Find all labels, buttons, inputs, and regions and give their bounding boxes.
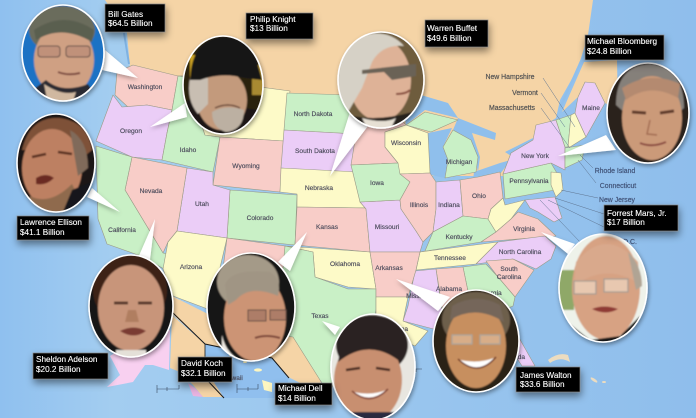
label: Michael Bloomberg (585, 35, 664, 60)
state: Kentucky (420, 216, 496, 252)
state: South Dakota (281, 130, 358, 174)
state labels: Washington (128, 84, 163, 91)
state: Vermont (556, 115, 571, 147)
pointer: James Walton to Arkansas (396, 279, 450, 311)
state: Maine (575, 82, 605, 137)
state labels: Wyoming (232, 163, 260, 170)
state labels: Utah (195, 201, 209, 208)
state: New Hampshire (568, 113, 586, 147)
state: Washington (115, 65, 178, 110)
state labels: New York (521, 153, 550, 160)
state labels: Alabama (436, 286, 462, 293)
portrait: Sheldon Adelson (88, 254, 174, 358)
state: Virginia (481, 212, 556, 242)
state: Kansas (295, 207, 370, 252)
map of the United States and neighbours (96, 0, 637, 398)
state labels: California (108, 227, 136, 234)
state labels: Mississippi (406, 293, 438, 300)
state: North Dakota (284, 93, 356, 134)
state: New Jersey (551, 172, 563, 197)
state labels: Virginia (513, 226, 535, 233)
Hawaiian islands (229, 354, 272, 392)
label: Lawrence Ellison (17, 216, 89, 240)
Bahamas and Cuba (548, 354, 606, 383)
state: Tennessee (416, 242, 498, 270)
state: Michigan (406, 112, 478, 178)
Alaska panhandle (188, 383, 203, 397)
scale bars (157, 369, 422, 393)
Puget inlet (124, 33, 129, 64)
state: Iowa (351, 163, 410, 202)
portrait: Michael Bloomberg (605, 62, 691, 166)
state labels: Vermont (512, 90, 538, 97)
state: Missouri (360, 200, 423, 252)
state: Alabama (436, 267, 475, 325)
state: Florida (445, 318, 535, 366)
leader lines (540, 78, 606, 242)
label: Sheldon Adelson: $20.2 Billion (36, 365, 81, 374)
state labels: Maine (582, 105, 600, 112)
label: Warren Buffet: Warren Buffet (427, 24, 478, 33)
portrait: Philip Knight (182, 36, 264, 136)
state labels: Missouri (375, 224, 400, 231)
state: Maryland and Delaware (525, 197, 562, 222)
state labels: Illinois (410, 202, 429, 209)
label: Bill Gates (105, 4, 165, 32)
label: Michael Dell: $14 Billion (278, 394, 316, 403)
state: Mississippi (403, 269, 445, 332)
state labels: North Dakota (294, 111, 333, 118)
label: Forrest Mars, Jr.: Forrest Mars, Jr. (607, 209, 667, 218)
state: Massachusetts and Connecticut (565, 145, 585, 168)
state: South Carolina (486, 259, 534, 297)
state labels: Oregon (120, 128, 142, 135)
pointer: Sheldon Adelson to Nevada (138, 219, 155, 260)
label: Sheldon Adelson (33, 353, 108, 379)
state labels: Kentucky (445, 234, 473, 241)
pointer: David Koch to Kansas (278, 232, 307, 271)
label: Forrest Mars, Jr.: $17 Billion (607, 218, 645, 227)
label: Bill Gates: $64.5 Billion (108, 19, 153, 28)
state labels: Indiana (438, 202, 460, 209)
land: Mexico (172, 296, 325, 395)
state: Wisconsin (385, 125, 430, 174)
pointers from portraits to states (87, 50, 616, 335)
label: James Walton (516, 367, 580, 392)
state labels: Arkansas (375, 265, 403, 272)
state: Ohio (460, 172, 503, 219)
land: Canada (105, 0, 593, 176)
state labels: Florida (505, 354, 525, 361)
state labels: North Carolina (499, 249, 542, 256)
state labels: Arizona (180, 264, 203, 271)
state labels (108, 74, 637, 382)
state: Louisiana (376, 297, 428, 346)
state: Minnesota (348, 95, 406, 165)
label: Michael Bloomberg: $24.8 Billion (587, 47, 632, 56)
state labels: Colorado (247, 215, 274, 222)
state labels: New Hampshire (485, 74, 535, 81)
state labels: Ohio (472, 193, 486, 200)
state: Nebraska (280, 168, 376, 208)
portrait: Lawrence Ellison (16, 112, 96, 214)
state labels: South (500, 266, 518, 273)
label: Michael Dell: Michael Dell (278, 384, 323, 393)
state labels: D.C. (623, 239, 637, 246)
inset: Hawaii water (205, 344, 288, 398)
state labels: Oklahoma (330, 261, 360, 268)
state: Oklahoma (285, 246, 376, 289)
state: Georgia (463, 264, 515, 320)
label: Michael Bloomberg: Michael Bloomberg (587, 37, 658, 46)
state: Wyoming (213, 137, 284, 192)
state labels: Massachusetts (489, 105, 536, 112)
state labels: Texas (311, 313, 329, 320)
label: Lawrence Ellison: $41.1 Billion (20, 228, 65, 237)
state labels: Rhode Island (595, 168, 635, 175)
state labels: Tennessee (434, 255, 466, 262)
state: Pennsylvania (503, 163, 561, 199)
portrait: David Koch (205, 250, 297, 364)
state labels: Pennsylvania (509, 178, 549, 185)
label: Philip Knight (246, 13, 313, 39)
portrait: James Walton (431, 289, 521, 395)
state labels: Louisiana (380, 326, 408, 333)
state: Montana (178, 76, 290, 141)
inset dividing lines (173, 313, 289, 378)
pointer: Lawrence Ellison to California (87, 188, 120, 212)
label: Warren Buffet (425, 20, 488, 47)
state labels: Georgia (478, 290, 502, 297)
portrait: Michael Dell (330, 312, 418, 418)
label: David Koch: $32.1 Billion (181, 369, 226, 378)
state: New Mexico (215, 238, 285, 340)
label: Sheldon Adelson: Sheldon Adelson (36, 355, 98, 364)
label: Lawrence Ellison: Lawrence Ellison (20, 218, 82, 227)
label: Philip Knight: $13 Billion (250, 24, 288, 33)
state labels: Michigan (446, 159, 473, 166)
state labels: Wisconsin (391, 140, 421, 147)
state labels: Carolina (497, 274, 522, 281)
land: Atlantic Canada (562, 60, 618, 112)
label: David Koch (178, 357, 232, 382)
state labels: Connecticut (600, 183, 636, 190)
pointer: Bill Gates to Washington (102, 50, 138, 78)
label: Philip Knight: Philip Knight (250, 15, 296, 24)
state: North Carolina (476, 236, 556, 269)
label: Warren Buffet: $49.6 Billion (427, 34, 472, 43)
state labels: South Dakota (295, 148, 335, 155)
state: New York (503, 120, 565, 174)
pointer: Warren Buffet to Nebraska (330, 112, 368, 176)
state: Texas (240, 246, 376, 395)
state labels: Hawaii (223, 375, 243, 382)
label: Bill Gates: Bill Gates (108, 10, 143, 19)
state: Colorado (227, 190, 297, 245)
label: James Walton: James Walton (520, 371, 572, 380)
pointer: Philip Knight to Oregon (150, 103, 187, 127)
state: Utah (177, 168, 230, 238)
state labels: Nevada (140, 188, 163, 195)
label: Forrest Mars, Jr. (604, 205, 678, 231)
state: Indiana (433, 180, 463, 232)
state: Oregon (96, 95, 172, 160)
St Lawrence channel (560, 50, 586, 108)
label: David Koch: David Koch (181, 359, 223, 368)
portrait: Bill Gates (20, 4, 110, 104)
state: Arkansas (370, 252, 420, 297)
state: California (96, 146, 167, 270)
state labels: Nebraska (305, 185, 333, 192)
state labels: Iowa (370, 180, 384, 187)
state: West Virginia (488, 198, 525, 232)
portrait: Forrest Mars, Jr. (558, 232, 650, 344)
state labels: Idaho (180, 147, 197, 154)
label: Michael Dell (275, 383, 332, 405)
state labels: New Jersey (599, 197, 636, 204)
Great Lakes (405, 95, 536, 180)
label: James Walton: $33.6 Billion (520, 380, 565, 389)
land: Mexico inset (170, 315, 224, 397)
state: Nevada (125, 157, 187, 253)
state: Arizona (163, 231, 227, 310)
pointer: Michael Bloomberg to New York (558, 135, 616, 156)
pointer: Michael Dell to Texas (322, 321, 340, 335)
state: Illinois (400, 173, 436, 242)
pointer: Forrest Mars to Virginia (541, 232, 575, 254)
state labels: Kansas (316, 224, 339, 231)
portrait: Warren Buffet (336, 30, 426, 132)
state: Alaska (107, 330, 170, 387)
state: Idaho (162, 76, 220, 172)
